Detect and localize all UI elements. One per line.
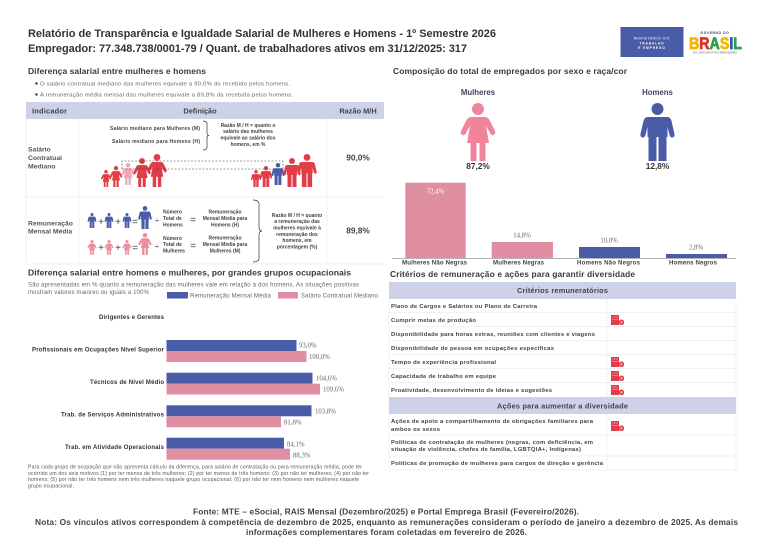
group: técnicos: [90, 373, 344, 394]
footer: fonte e nota: [35, 506, 738, 537]
group: técnicos: 104,6%: [316, 376, 337, 382]
definition text: homens: Remuneração: [208, 210, 242, 216]
rows: critérios: Proatividade, desenvolvimento de ideias e sugestões: [391, 388, 553, 394]
table header: Definição: [183, 106, 217, 116]
bar chart: raça/cor: Homens Não Negros: [577, 260, 641, 266]
icon: soma homens: +: [98, 217, 104, 228]
logo: ministério do trabalho e emprego: E EMPREGO: [638, 46, 666, 50]
definition text: Razão M / H = quanto o: [221, 123, 275, 129]
definition text: razão: remuneração dos: [276, 232, 318, 238]
rows: ações: situação de violência, chefes de família, LGBTQIA+, Indígenas): [391, 447, 581, 453]
text block: bullets: [35, 82, 293, 98]
icon: mulheres 87,2%: Mulheres: [461, 88, 496, 97]
bar chart: raça/cor: [392, 183, 736, 266]
title: [28, 28, 496, 55]
definition text: homens: Homens: [163, 222, 183, 228]
indicator label: Mediano: [28, 164, 56, 170]
text block: nota de rodapé do gráfico: grupo ocupacional.: [28, 484, 74, 490]
panel: tabela de critérios: [389, 282, 736, 470]
text block: bullets: O salário contratual mediano das mulheres equivale a 90,0% do recebido pelos homens.: [40, 82, 290, 88]
definition text: Salário mediano para Mulheres (M): [110, 126, 200, 132]
row: remuneração mensal média: [28, 200, 370, 262]
group: técnicos: 109,6%: [323, 386, 344, 394]
dashed connector: [122, 161, 283, 169]
definition text: razão: Razão M / H = quanto: [272, 213, 322, 219]
title: Relatório de Transparência e Igualdade Salarial de Mulheres e Homens - 1º Semestre 2026: [28, 28, 496, 40]
table grid: [389, 299, 736, 470]
rows: ações: ambos os sexos: [391, 427, 441, 433]
logo: governo do brasil: DO LADO DO POVO BRASILEIRO: [693, 50, 738, 54]
icon: homens 12,8%: [640, 88, 675, 171]
bar chart: raça/cor: 10,0%: [600, 238, 618, 244]
group: serviços administrativos: [61, 405, 336, 427]
definition text: Salário mediano para Homens (H): [112, 139, 200, 145]
rows: ações: [391, 419, 604, 467]
group: profissionais: 93,0%: [299, 342, 317, 350]
footer: fonte e nota: Fonte: MTE – eSocial, RAIS Mensal (Dezembro/2025) e Portal Emprega Brasil (Fevereiro/2026).: [193, 506, 579, 516]
logo: governo do brasil: GOVERNO DO: [701, 31, 729, 35]
definition text: homens: [163, 210, 247, 228]
footer: fonte e nota: Nota: Os vínculos ativos correspondem à competência de dezembro de 2025, enquanto as remunerações consideram o período de janeiro a dezembro de 2025. As demais: [35, 517, 738, 527]
logo: governo do brasil: BRASIL: [689, 34, 742, 53]
heading: composição: Composição do total de empregados por sexo e raça/cor: [393, 66, 628, 76]
group: dirigentes e gerentes: Dirigentes e Gerentes: [99, 315, 165, 321]
text block: explicação: mostram valores maiores ou iguais a 100%: [28, 290, 150, 296]
group: atividade operacionais: Trab. em Atividade Operacionais: [65, 445, 165, 451]
footer: fonte e nota: informações complementares foram coletadas em fevereiro de 2026.: [246, 527, 527, 537]
icon: homens 12,8%: Homens: [642, 88, 674, 97]
logo: ministério do trabalho e emprego: TRABALHO: [639, 42, 665, 46]
icon: soma homens: +: [115, 217, 121, 228]
heading: diferença salarial entre mulheres e homens: Diferença salarial entre mulheres e homens: [28, 66, 206, 76]
text block: explicação: [28, 282, 359, 296]
rows: critérios: Tempo de experiência profissional: [391, 360, 496, 366]
group: profissionais: Profissionais em Ocupações Nível Superior: [32, 348, 165, 354]
definition text: mulheres: [163, 236, 247, 254]
group: atividade operacionais: 88,3%: [293, 452, 311, 460]
definition text: mulheres: =: [190, 241, 196, 252]
group: atividade operacionais: [65, 438, 311, 460]
icon: homens em ordem de salário: [251, 154, 317, 187]
row: salário contratual mediano: [28, 121, 370, 187]
definition text: homens: Total de: [163, 216, 182, 222]
heading: diferença por grupos ocupacionais: Diferença salarial entre homens e mulheres, por grandes grupos ocupacionais: [28, 268, 351, 278]
brace: [253, 200, 262, 262]
heading: critérios: Critérios de remuneração e ações para garantir diversidade: [390, 269, 635, 279]
brace: [203, 121, 209, 150]
icon: mulheres 87,2%: [461, 88, 496, 171]
icon: soma mulheres: ÷: [155, 242, 160, 251]
icon: mulheres 87,2%: 87,2%: [466, 161, 490, 171]
bar chart: raça/cor: 72,4%: [427, 188, 445, 196]
icon: empresa adota ação: [611, 421, 624, 431]
group: serviços administrativos: 81,8%: [284, 420, 302, 426]
bar chart: raça/cor: Mulheres Não Negras: [402, 260, 468, 266]
header: ações: [389, 397, 736, 414]
definition text: homens: =: [190, 215, 196, 226]
definition text: razão: homens, em: [282, 238, 312, 244]
definition text: [110, 123, 276, 148]
definition text: mulheres: Remuneração: [208, 236, 242, 242]
icon: soma homens: ÷: [155, 216, 160, 225]
definition text: homens, em %: [230, 142, 266, 148]
definition text: mulheres: Número: [163, 236, 182, 242]
definition text: razão: [272, 213, 322, 250]
logo: ministério do trabalho e emprego: [620, 27, 684, 57]
text block: nota de rodapé do gráfico: [28, 464, 369, 490]
text block: explicação: São apresentadas em % quanto a remuneração das mulheres vale em relação à dos homens. As situações positivas: [28, 282, 359, 288]
bar chart: grupos ocupacionais: [32, 315, 344, 460]
group: serviços administrativos: 103,8%: [315, 408, 336, 416]
indicator label: Salário: [28, 146, 51, 154]
definition text: homens: Número: [163, 210, 182, 216]
rows: critérios: Cumprir metas de produção: [391, 318, 476, 324]
icon: soma mulheres: [88, 233, 160, 255]
definition text: razão: mulheres equivale à: [273, 226, 321, 232]
indicator label: [28, 220, 73, 236]
table grid: [26, 119, 384, 264]
definition text: mulheres: Total de: [163, 242, 182, 248]
indicator label: [28, 146, 62, 170]
definition text: razão: a remuneração das: [274, 219, 320, 225]
table header: Razão M/H: [339, 106, 377, 116]
indicator label: Remuneração: [28, 220, 73, 228]
icon: mulheres em ordem de salário: [101, 154, 167, 187]
indicator label: Mensal Média: [28, 228, 72, 236]
table header: [26, 102, 384, 119]
icon: soma mulheres: +: [98, 243, 104, 254]
bar chart: raça/cor: Mulheres Negras: [493, 260, 545, 266]
icon: soma homens: [88, 206, 160, 229]
header: critérios remuneratórios: [389, 282, 736, 299]
rows: ações: Políticas de contratação de mulheres (negras, com deficiência, em: [391, 440, 593, 446]
logo: ministério do trabalho e emprego: MINISTÉRIO DO: [634, 36, 670, 40]
definition text: homens: Mensal Média para: [203, 216, 247, 222]
legend: Salário Contratual Mediano: [301, 294, 379, 300]
text block: nota de rodapé do gráfico: homens; (5) por não ter três homens nem três mulheres naquele grupo ocupacional; (6) por não ter nem homens nem mulheres naquele: [28, 477, 359, 483]
text block: nota de rodapé do gráfico: ocorrido um dos seis motivos (1) por ter menos de três mulheres; (2) por ter menos de três homens; (3) por não ter mulheres; (4) por não ter: [28, 471, 369, 477]
definition text: mulheres: Mulheres (M): [210, 248, 241, 254]
definition text: equivale ao salário dos: [220, 136, 276, 142]
table header: Indicador: [32, 106, 67, 116]
rows: critérios: [391, 304, 596, 394]
value: 89,8%: [346, 226, 370, 236]
icon: homens 12,8%: 12,8%: [646, 161, 670, 171]
rows: ações: Ações de apoio a compartilhamento de obrigações familiares para: [391, 419, 594, 425]
bar chart: raça/cor: Homens Negros: [669, 260, 718, 266]
legend: [167, 292, 379, 300]
rows: critérios: Disponibilidade de pessoa em ocupações específicas: [391, 346, 555, 352]
rows: critérios: Capacidade de trabalho em equipe: [391, 374, 497, 380]
rows: critérios: Disponibilidade para horas extras, reuniões com clientes e viagens: [391, 332, 596, 338]
definition text: mulheres: Mulheres: [163, 248, 185, 254]
group: técnicos: Técnicos de Nível Médio: [90, 380, 164, 386]
group: profissionais: [32, 340, 330, 362]
definition text: salário das mulheres: [223, 129, 273, 135]
value: 90,0%: [346, 152, 370, 162]
definition text: mulheres: Mensal Média para: [203, 242, 247, 248]
group: atividade operacionais: 84,1%: [287, 442, 305, 448]
rows: critérios: Plano de Cargos e Salários ou Plano de Carreira: [391, 304, 538, 310]
indicator label: Contratual: [28, 155, 62, 162]
definition text: homens: Homens (H): [211, 222, 239, 228]
title: Empregador: 77.348.738/0001-79 / Quant. de trabalhadores ativos em 31/12/2025: 317: [28, 43, 467, 55]
text block: bullets: A remuneração média mensal das mulheres equivale a 89,8% da recebida pelos homens.: [40, 92, 293, 98]
panel: tabela de indicadores: [26, 102, 384, 264]
bar chart: raça/cor: 14,8%: [513, 232, 531, 240]
icon: soma homens: =: [132, 217, 138, 228]
group: profissionais: 100,0%: [309, 354, 330, 361]
bar chart: raça/cor: 2,8%: [689, 244, 703, 252]
header: critérios remuneratórios: Critérios remuneratórios: [517, 286, 608, 295]
text block: nota de rodapé do gráfico: Para cada grupo de ocupação que não apresenta cálculo da diferença, para salário de contratação ou para remuneração média, pode ter: [28, 464, 362, 470]
icons: empresa adota critério: [611, 315, 624, 395]
header: ações: Ações para aumentar a diversidade: [497, 402, 628, 410]
rows: ações: Políticas de promoção de mulheres para cargos de direção e gerência: [391, 461, 604, 467]
icon: soma mulheres: +: [115, 243, 121, 254]
definition text: razão: porcentagem (%): [277, 244, 318, 250]
icon: soma mulheres: =: [132, 243, 138, 254]
group: serviços administrativos: Trab. de Serviços Administrativos: [61, 412, 165, 418]
legend: Remuneração Mensal Média: [190, 294, 272, 300]
